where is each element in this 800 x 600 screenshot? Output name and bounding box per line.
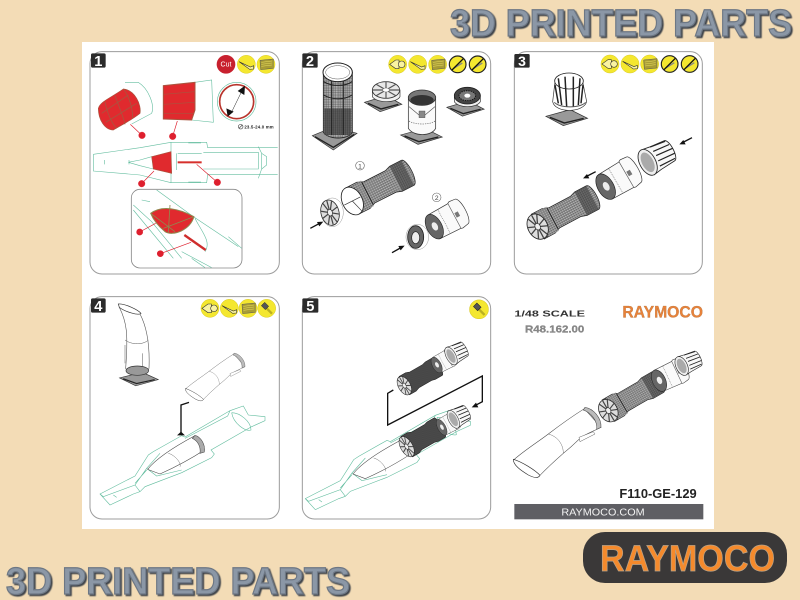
arrow — [310, 222, 323, 228]
step badge 1: 1 — [94, 54, 102, 70]
mid section — [591, 154, 646, 204]
icon: knife — [237, 55, 255, 73]
step badge 2 — [302, 53, 318, 70]
panel frame — [90, 52, 279, 274]
arrow — [388, 376, 482, 425]
icon: cut — [217, 55, 235, 74]
white instruction sheet — [82, 42, 714, 529]
tool icons — [389, 55, 486, 73]
panel frame — [302, 297, 491, 519]
loose engine assembly — [394, 339, 471, 398]
printed nozzle part — [546, 73, 588, 126]
step badge 1 — [91, 53, 106, 70]
panel 2: printed parts assembly — [302, 52, 491, 274]
red cylinder cut part — [98, 82, 153, 130]
product code: R48.162.00 — [525, 324, 585, 335]
tool icons — [601, 55, 698, 73]
panel frame — [90, 297, 279, 519]
printed dark disc part — [447, 87, 484, 116]
step badge 4: 4 — [94, 299, 103, 315]
arrow — [679, 138, 692, 144]
step badge 2: 2 — [306, 54, 314, 70]
step badge 4 — [91, 298, 106, 315]
mid section — [420, 197, 472, 243]
panel 3: engine assembly — [514, 52, 702, 274]
panel 5: final installation — [302, 297, 491, 519]
brand badge: RAYMOCO — [600, 538, 775, 579]
engine core with open front — [337, 158, 418, 219]
plan view airframe — [93, 142, 278, 183]
exploded engine — [594, 348, 705, 426]
icon: sanding — [257, 55, 275, 73]
panel 4: duct installation — [90, 297, 279, 519]
model name: F110-GE-129 — [619, 486, 697, 501]
airframe with engine — [305, 403, 473, 510]
callout markers — [130, 121, 221, 187]
panel frame — [302, 52, 491, 274]
callout number 2: 2 — [435, 195, 439, 202]
diameter gauge — [217, 82, 256, 121]
scale label: 1/48 SCALE — [514, 310, 586, 319]
step badge 5: 5 — [306, 299, 314, 315]
inset detail — [131, 189, 242, 268]
tool icons — [201, 299, 276, 317]
step badge 3: 3 — [518, 53, 526, 69]
printed duct part — [118, 304, 158, 386]
website bar: RAYMOCO.COM — [561, 507, 645, 518]
panel frame — [514, 52, 702, 274]
printed wheel part — [365, 82, 402, 112]
icon: brush — [470, 300, 488, 319]
full engine core — [522, 183, 603, 244]
arrow — [392, 246, 405, 253]
callout number 1: 1 — [358, 163, 362, 170]
arrow — [583, 172, 596, 178]
printed cylinder part — [401, 90, 442, 144]
step badge 3 — [514, 53, 530, 69]
panel 6: product info — [513, 302, 705, 519]
printed column part — [312, 63, 357, 150]
front wheel — [318, 198, 343, 227]
panel 1: cutting — [90, 52, 279, 274]
rear ring — [406, 224, 429, 250]
plan view red areas — [152, 152, 202, 173]
nozzle — [634, 137, 680, 178]
exploded duct — [513, 407, 601, 478]
diameter label: 23.5-24.0 mm — [244, 124, 274, 129]
airframe with duct — [100, 406, 265, 505]
icon: cut: Cut — [221, 62, 231, 69]
step badge 5 — [302, 298, 318, 315]
red panel cut part — [163, 80, 213, 122]
callout number 1 — [356, 161, 364, 170]
website bar — [514, 504, 703, 519]
loose duct — [185, 353, 245, 401]
small brand logo: RAYMOCO — [622, 302, 703, 321]
arrow — [177, 402, 189, 435]
callout number 2 — [432, 193, 441, 202]
